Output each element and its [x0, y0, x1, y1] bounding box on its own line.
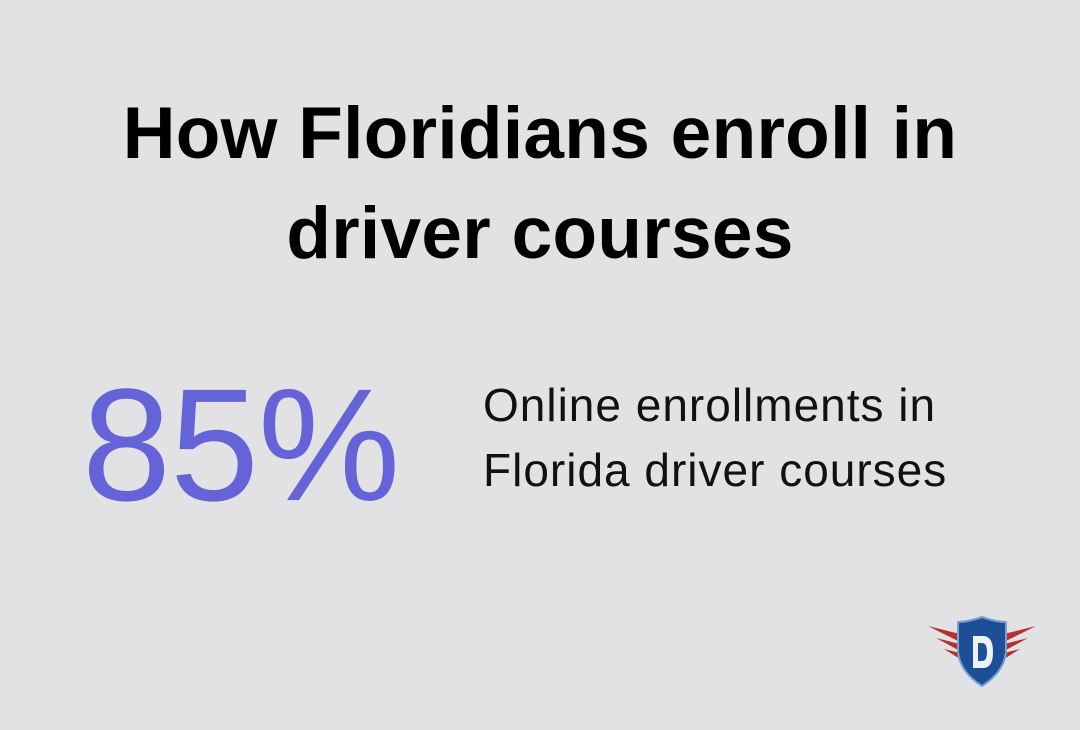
- stat description: [483, 379, 947, 496]
- stat number: 85%: [82, 355, 399, 534]
- title: [123, 93, 957, 274]
- icon: logo shield with wings: [928, 616, 1036, 687]
- title: driver courses: [286, 193, 794, 274]
- stat description: Online enrollments in: [483, 379, 936, 431]
- stat description: Florida driver courses: [483, 444, 947, 496]
- title: How Floridians enroll in: [123, 93, 957, 174]
